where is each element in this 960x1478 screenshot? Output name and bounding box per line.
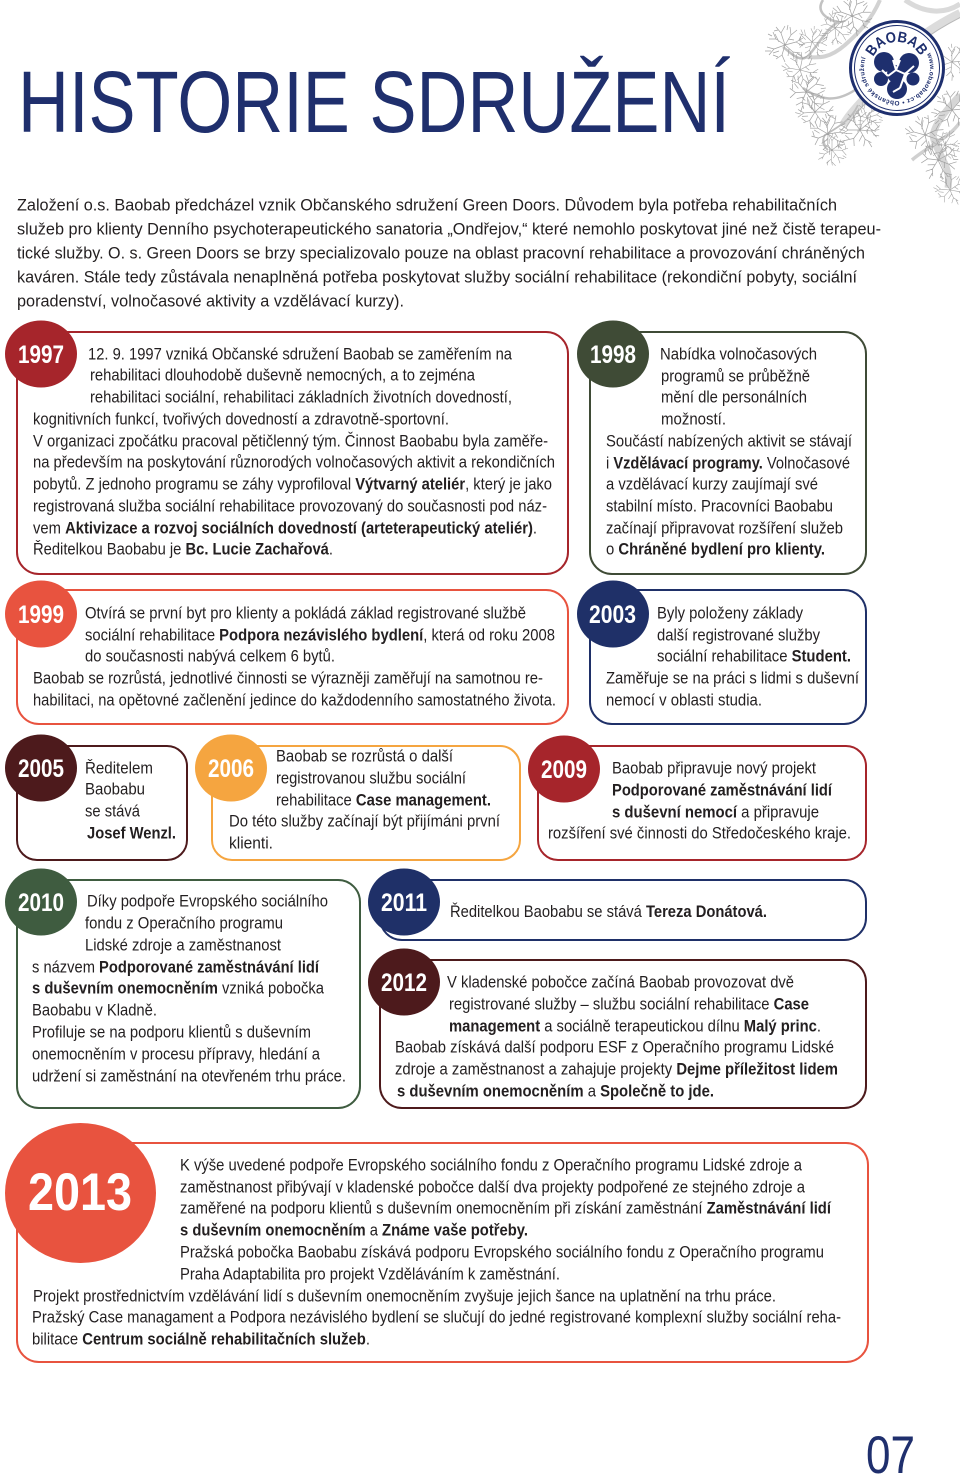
- text: 2003: sociální rehabilitace Student.: [657, 646, 851, 666]
- text: 1997: registrovaná služba sociální rehabilitace provozovaný do současnosti pod náz-: [33, 496, 547, 516]
- text: 2005: [85, 758, 176, 842]
- logo: Baobab stamp: [849, 20, 945, 116]
- badge: 2003: [577, 580, 649, 648]
- panel: 2011: [368, 868, 866, 940]
- text: 2009: [548, 758, 851, 842]
- text: 1997: rehabilitaci sociální, rehabilitaci základních životních dovedností,: [90, 388, 512, 406]
- text: 1998: možností.: [661, 410, 726, 428]
- text: 2010: Lidské zdroje a zaměstnanost: [85, 936, 281, 954]
- logo: Baobab stamp: BAOBAB: [865, 32, 927, 56]
- text: 2013: zaměřené na podporu klientů s duševním onemocněním při získání zaměstnání Zaměstnávání lidí: [180, 1198, 832, 1218]
- text: 2005: Ředitelem: [85, 758, 153, 778]
- text: 1997: [33, 344, 555, 558]
- badge: 2005: 2005: [18, 755, 64, 783]
- text: 2006: rehabilitace Case management.: [276, 790, 491, 810]
- intro text: [17, 196, 881, 310]
- badge: 2006: [195, 734, 267, 802]
- panel: 2003: [577, 580, 866, 724]
- panel: 1999: [5, 580, 568, 724]
- panel: 1997: [5, 320, 568, 574]
- text: 2009: Podporované zaměstnávání lidí: [612, 780, 833, 800]
- text: 1997: rehabilitaci dlouhodobě duševně nemocných, a to zejména: [90, 366, 475, 384]
- text: 2006: [229, 746, 500, 852]
- badge: 1997: [5, 320, 77, 388]
- text: 1998: Součástí nabízených aktivit se stávají: [606, 432, 852, 450]
- text: 2006: klienti.: [229, 834, 273, 852]
- text: 2013: Projekt prostřednictvím vzdělávání lidí s duševním onemocněním zvyšuje jejich šance na uplatnění na trhu práce.: [33, 1286, 776, 1306]
- badge: 2013: [5, 1123, 156, 1263]
- text: 1998: Nabídka volnočasových: [660, 344, 817, 364]
- text: 2003: [606, 604, 859, 710]
- text: 1999: Baobab se rozrůstá, jednotlivé činnosti se výrazněji zaměřují na samotnou re-: [33, 668, 543, 688]
- text: 2012: Baobab získává další podporu ESF z Operačního programu Lidské: [395, 1038, 834, 1056]
- text: 2012: [395, 972, 838, 1100]
- badge: 2003: 2003: [589, 601, 636, 629]
- text: 2013: zaměstnanost přibývají v kladenské pobočce další dva projekty podpořené ze stejného zdroje a: [180, 1178, 805, 1196]
- badge: 2011: 2011: [381, 889, 427, 917]
- text: 1999: sociální rehabilitace Podpora nezávislého bydlení, která od roku 2008: [85, 626, 555, 644]
- text: 1998: i Vzdělávací programy. Volnočasové: [606, 454, 850, 472]
- text: 1999: [33, 604, 556, 710]
- text: 2013: K výše uvedené podpoře Evropského sociálního fondu z Operačního programu Lidské zdroje a: [180, 1156, 802, 1174]
- text: 2010: udržení si zaměstnání na otevřeném trhu práce.: [32, 1066, 346, 1086]
- text: 1999: do současnosti nabývá celkem 6 bytů.: [85, 646, 335, 666]
- text: 2012: V kladenské pobočce začíná Baobab provozovat dvě: [447, 972, 794, 992]
- text: 2010: Díky podpoře Evropského sociálního: [87, 892, 328, 910]
- text: 1998: mění dle personálních: [661, 388, 807, 406]
- text: 1997: 12. 9. 1997 vzniká Občanské sdružení Baobab se zaměřením na: [88, 344, 512, 364]
- text: 2010: Baobabu v Kladně.: [32, 1000, 157, 1020]
- text: 2005: Josef Wenzl.: [87, 824, 176, 842]
- intro text: tické služby. O. s. Green Doors se brzy specializovalo pouze na oblast pracovní rehabilitace a provozování chráněných: [17, 244, 865, 262]
- text: 2011: Ředitelkou Baobabu se stává Tereza Donátová.: [450, 902, 767, 921]
- text: 2010: Profiluje se na podporu klientů s duševním: [32, 1022, 311, 1042]
- panel: 2006: [195, 734, 520, 860]
- text: 2003: nemocí v oblasti studia.: [606, 690, 762, 710]
- panel: 2010: [5, 868, 360, 1108]
- text: 2010: s názvem Podporované zaměstnávání lidí: [32, 958, 320, 976]
- text: 1997: pobytů. Z jednoho programu se záhy vyprofiloval Výtvarný ateliér, který je jako: [33, 474, 552, 494]
- panel: 2009: [528, 736, 866, 860]
- text: 2005: se stává: [85, 802, 140, 820]
- intro text: kaváren. Stále tedy zůstávala nenaplněná potřeba poskytovat služby sociální rehabilitace (rekondiční pobyty, sociální: [17, 268, 857, 286]
- text: 2010: fondu z Operačního programu: [85, 914, 283, 932]
- badge: 1999: 1999: [18, 601, 64, 629]
- text: 2006: Do této služby začínají být přijímáni první: [229, 812, 500, 830]
- text: 2012: zdroje a zaměstnanost a zahajuje projekty Dejme příležitost lidem: [395, 1060, 838, 1078]
- panel: 2005: [5, 734, 187, 860]
- text: 2006: registrovanou službu sociální: [276, 768, 466, 788]
- text: 2013: Pražský Case managament a Podpora nezávislého bydlení se slučují do jedné registrované komplexní služby sociální reha-: [32, 1308, 841, 1326]
- illustration: baobab tree: [765, 0, 960, 209]
- text: 2006: Baobab se rozrůstá o další: [276, 746, 453, 766]
- text: 1998: [606, 344, 852, 558]
- panel: 2012: [368, 948, 866, 1108]
- text: 2012: management a sociálně terapeutickou dílnu Malý princ.: [449, 1016, 821, 1036]
- badge: 2009: [528, 736, 600, 802]
- badge: 1998: [577, 320, 649, 388]
- text: 2003: další registrované služby: [657, 626, 820, 644]
- logo: Baobab stamp: www.obaobab.cz • Občanské sdružení: [859, 52, 934, 106]
- intro text: poradenství, volnočasové aktivity a vzdělávací kurzy).: [17, 292, 404, 310]
- text: 1998: programů se průběžně: [661, 366, 810, 386]
- text: 2003: Zaměřuje se na práci s lidmi s duševní: [606, 668, 859, 688]
- panel: 2013: [5, 1123, 868, 1362]
- text: 2009: rozšíření své činnosti do Středočeského kraje.: [548, 824, 851, 842]
- text: 2009: s duševní nemocí a připravuje: [612, 802, 819, 822]
- text: 2010: s duševním onemocněním vzniká pobočka: [32, 978, 324, 998]
- badge: 2012: [368, 948, 440, 1016]
- text: 1998: začínají připravovat rozšíření služeb: [606, 518, 843, 538]
- text: 2012: s duševním onemocněním a Společně to jde.: [397, 1082, 714, 1100]
- title: HISTORIE SDRUŽENÍ: [18, 54, 731, 151]
- text: 2003: Byly položeny základy: [657, 604, 803, 622]
- text: 2005: Baobabu: [85, 780, 145, 798]
- text: 1998: o Chráněné bydlení pro klienty.: [606, 540, 825, 558]
- panel: 1998: [577, 320, 866, 574]
- badge: 1999: [5, 580, 77, 648]
- text: 1998: a vzdělávací kurzy zaujímají své: [606, 474, 818, 494]
- badge: 2010: 2010: [18, 889, 64, 917]
- text: 2013: s duševním onemocněním a Známe vaše potřeby.: [180, 1220, 528, 1240]
- badge: 2006: 2006: [208, 755, 254, 783]
- intro text: Založení o.s. Baobab předcházel vznik Občanského sdružení Green Doors. Důvodem byla potřeba rehabilitačních: [17, 196, 837, 214]
- text: 1997: na především na poskytování různorodých volnočasových aktivit a rekondičních: [33, 452, 555, 472]
- badge: 2009: 2009: [541, 756, 587, 784]
- text: 2010: [32, 892, 346, 1086]
- text: 2010: onemocněním v procesu přípravy, hledání a: [32, 1044, 320, 1064]
- text: 1997: Ředitelkou Baobabu je Bc. Lucie Zachařová.: [33, 540, 333, 558]
- badge: 1997: 1997: [18, 341, 64, 369]
- text: 1997: V organizaci zpočátku pracoval pětičlenný tým. Činnost Baobabu byla zaměře-: [33, 432, 548, 450]
- text: 1998: stabilní místo. Pracovníci Baobabu: [606, 496, 833, 516]
- badge: 2011: [368, 868, 440, 936]
- text: 1997: vem Aktivizace a rozvoj sociálních dovedností (arteterapeutický ateliér).: [33, 518, 537, 538]
- text: 2009: Baobab připravuje nový projekt: [612, 758, 816, 778]
- badge: 1998: 1998: [590, 341, 636, 369]
- text: 2013: [32, 1156, 841, 1348]
- text: 2013: Pražská pobočka Baobabu získává podporu Evropského sociálního fondu z Operačního programu: [180, 1242, 824, 1262]
- text: 1997: kognitivních funkcí, tvořivých dovedností a zdravotně-sportovní.: [33, 410, 449, 428]
- text: 2012: registrované služby – službu sociální rehabilitace Case: [449, 994, 809, 1014]
- badge: 2012: 2012: [381, 969, 427, 997]
- intro text: služeb pro klienty Denního psychoterapeutického sanatoria „Ondřejov,“ které nemohlo poskytovat jiné než čistě terapeu-: [17, 220, 881, 238]
- text: 2013: Praha Adaptabilita pro projekt Vzděláváním k zaměstnání.: [180, 1264, 560, 1284]
- text: 1999: habilitaci, na opětovné začlenění jedince do každodenního samostatného života.: [33, 690, 556, 710]
- badge: 2013: 2013: [28, 1163, 132, 1222]
- badge: 2005: [5, 734, 77, 802]
- text: 1999: Otvírá se první byt pro klienty a pokládá základ registrované službě: [85, 604, 526, 622]
- text: 2013: bilitace Centrum sociálně rehabilitačních služeb.: [32, 1330, 370, 1348]
- badge: 2010: [5, 868, 77, 936]
